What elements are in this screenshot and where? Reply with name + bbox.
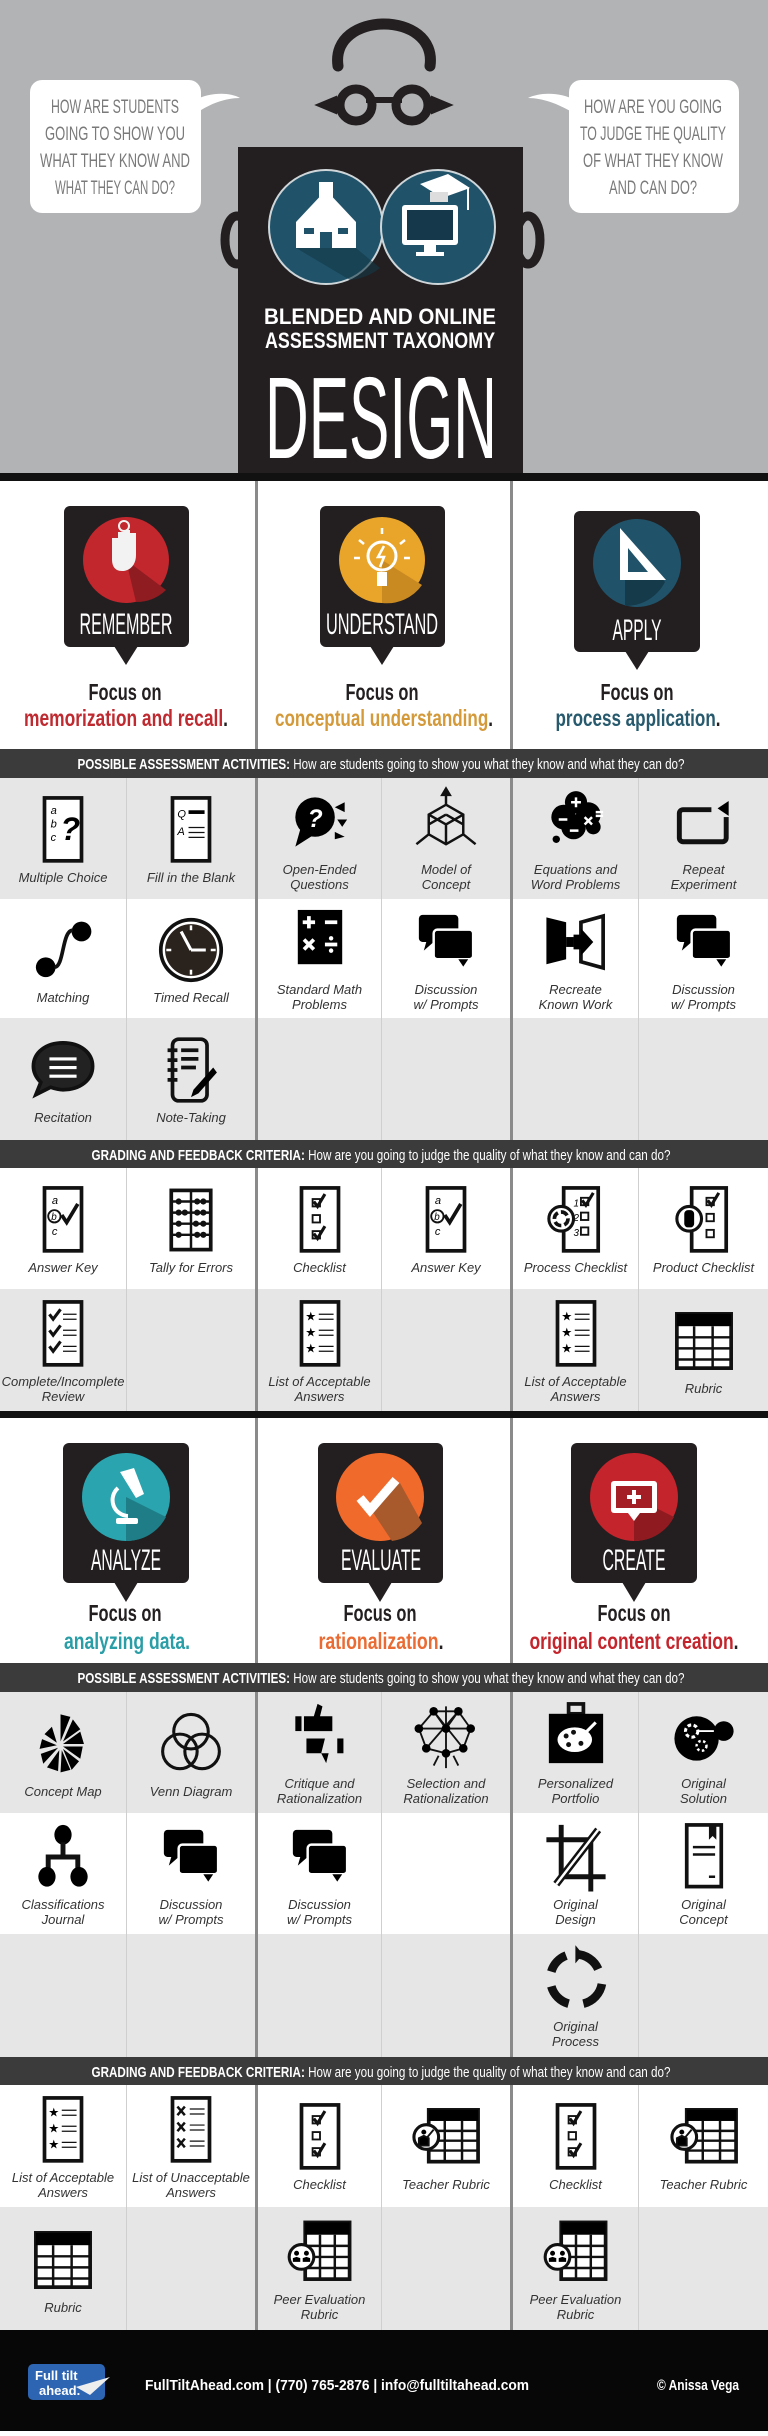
speech bubble: right — [528, 80, 739, 213]
cell: Teacher Rubric — [382, 2085, 513, 2207]
grid row: activities 2 — [0, 899, 768, 1018]
cell: Checklist — [258, 1168, 382, 1289]
cell: Checklist: Checklist — [293, 1260, 346, 1274]
cell: Teacher Rubric 2: Teacher Rubric — [660, 2177, 747, 2192]
icon: glasses head — [225, 24, 540, 264]
cell: Peer Evaluation Rubric 2: Rubric — [557, 2307, 594, 2322]
cell: Complete/Incomplete: Complete/Incomplete — [2, 1374, 124, 1388]
cell: Answer Key: Answer Key — [28, 1260, 98, 1274]
cell: Original Concept: Original — [681, 1897, 726, 1912]
cell: Process Checklist — [513, 1168, 639, 1289]
cell: Rubric — [675, 1312, 733, 1396]
cell: Discussion: Discussion — [160, 1897, 222, 1912]
level: understand — [320, 506, 445, 665]
cell: Teacher Rubric: Teacher Rubric — [402, 2177, 490, 2192]
title text: DESIGN — [265, 353, 497, 481]
cell: List of Acceptable: Answers — [38, 2184, 88, 2200]
panel: section 1 levels — [24, 481, 720, 749]
grid row: grading 2 — [0, 1289, 768, 1411]
cell: Recreate Known Work: Known Work — [539, 997, 612, 1012]
level: apply — [574, 511, 700, 670]
cell: Model of Concept — [382, 778, 513, 899]
grid row: activities 2-3 — [0, 1934, 768, 2057]
cell: Fill in the Blank — [127, 778, 258, 899]
cell: Open-Ended Questions — [258, 778, 382, 899]
cell: Original Process: Process — [552, 2034, 599, 2049]
cell: Original Process — [513, 1934, 639, 2057]
cell: Original Solution — [674, 1716, 734, 1806]
cell: List of Acceptable 2: Answers — [551, 1388, 600, 1404]
cell: Teacher Rubric 2 — [660, 2108, 748, 2192]
cell: Model of Concept: Concept — [422, 877, 470, 892]
focus texts 2: Focus on — [598, 1600, 670, 1626]
cell: Recreate Known Work: Recreate — [549, 982, 602, 997]
level: remember: REMEMBER — [80, 608, 172, 641]
cell: Critique: Rationalization — [277, 1791, 362, 1806]
cell: Matching — [0, 899, 127, 1018]
cell: Recreate Known Work — [513, 899, 639, 1018]
cell: Process Checklist: Process Checklist — [524, 1260, 627, 1274]
cell: Original Concept — [679, 1823, 728, 1927]
speech bubble: left: WHAT THEY CAN DO? — [55, 178, 175, 199]
cell: Discussion: Discussion — [415, 982, 477, 997]
title box — [238, 147, 523, 483]
cell: Repeat Experiment: Repeat — [683, 862, 724, 877]
speech bubble: left — [30, 80, 240, 213]
title text: ASSESSMENT TAXONOMY — [265, 328, 495, 353]
panel: section 2 levels — [63, 1418, 738, 1663]
logo — [28, 2364, 110, 2400]
speech bubble: left: WHAT THEY KNOW AND — [40, 151, 190, 172]
cell: List of Acceptable — [258, 1289, 382, 1411]
cell: Rubric: Rubric — [44, 2300, 82, 2314]
cell: Venn Diagram — [127, 1692, 258, 1813]
cell: Answer Key 2 — [382, 1168, 513, 1289]
cell: Fill in the Blank: Fill in the Blank — [147, 870, 235, 884]
bar: grading criteria 1 — [0, 1140, 768, 1168]
level: remember — [64, 506, 189, 665]
speech bubble: right: AND CAN DO? — [609, 178, 697, 199]
cell: Rubric — [0, 2207, 127, 2330]
cell: Tally for Errors — [127, 1168, 258, 1289]
cell: Checklist 2: Checklist — [549, 2177, 602, 2192]
level: analyze: ANALYZE — [91, 1544, 161, 1577]
cell: Discussion — [382, 899, 513, 1018]
cell: Critique: Critique and — [284, 1776, 355, 1791]
cell: Note-Taking: Note-Taking — [156, 1110, 226, 1125]
focus texts 2: Focus on — [344, 1600, 416, 1626]
cell: Original Solution: Solution — [680, 1791, 727, 1806]
title text — [264, 304, 497, 483]
contact text: FullTiltAhead.com | (770) 765-2876 | info@fulltiltahead.com — [145, 2377, 529, 2394]
cell: Discussion: w/ Prompts — [158, 1912, 224, 1927]
cell: List of Acceptable 2 — [513, 1289, 639, 1411]
cell: Timed Recall: Timed Recall — [153, 990, 229, 1004]
cell: Multiple Choice — [0, 778, 127, 899]
cell: Personalized Portfolio: Personalized — [538, 1776, 613, 1791]
cell: List of Unacceptable: List of Unacceptable — [132, 2170, 250, 2184]
cell: Discussion 2: w/ Prompts — [671, 997, 736, 1012]
cell: Original Concept: Concept — [679, 1912, 728, 1927]
level: create: CREATE — [602, 1544, 666, 1577]
cell: Complete/Incomplete — [0, 1289, 127, 1411]
level: evaluate: EVALUATE — [341, 1544, 421, 1577]
cell: Repeat Experiment: Experiment — [671, 877, 736, 892]
cell: Discussion 2: Discussion — [288, 1897, 351, 1912]
cell: List of Acceptable: Answers — [295, 1388, 344, 1404]
cell: Model of Concept: Model of — [421, 862, 471, 877]
cell: Peer Evaluation Rubric 2: Peer Evaluation — [530, 2292, 621, 2307]
focus texts: Focus on — [88, 679, 162, 705]
cell: Equations — [513, 778, 639, 899]
grid row: activities 2-2 — [0, 1813, 768, 1934]
cell: Peer Evaluation Rubric 2 — [513, 2207, 639, 2330]
cell: Concept Map: Concept Map — [24, 1784, 102, 1798]
cell: Open-Ended Questions: Open-Ended — [283, 862, 356, 877]
cell: Concept Map — [0, 1692, 127, 1813]
bar: grading criteria 1: GRADING AND FEEDBACK CRITERIA: How are you going to judge the quality of what they know and can do? — [92, 1147, 670, 1164]
cell: Tally for Errors: Tally for Errors — [149, 1260, 233, 1274]
cell: Recitation: Recitation — [34, 1110, 92, 1125]
title text: BLENDED AND ONLINE — [264, 304, 496, 329]
cell: Checklist: Checklist — [293, 2177, 346, 2192]
header — [0, 0, 768, 481]
cell: Checklist 2 — [513, 2085, 639, 2207]
focus texts: Focus on — [600, 679, 674, 705]
bar: possible assessment activities 1 — [0, 749, 768, 778]
grid row: grading 2-2 — [0, 2207, 768, 2330]
cell: List of Acceptable: List of Acceptable — [268, 1374, 371, 1388]
cell: Note-Taking — [127, 1018, 258, 1140]
cell: Selection: Rationalization — [403, 1791, 489, 1806]
bar: possible assessment activities 2 — [0, 1663, 768, 1692]
bar: grading criteria 2 — [0, 2057, 768, 2085]
focus texts 2: analyzing data. — [64, 1628, 190, 1654]
cell: Critique — [258, 1692, 382, 1813]
focus texts 2: Focus on — [88, 1600, 162, 1626]
cell: List of Acceptable — [0, 2085, 127, 2207]
cell: Repeat Experiment — [671, 801, 737, 892]
credit: © Anissa Vega — [657, 2377, 740, 2394]
level: apply: APPLY — [612, 614, 662, 647]
level: evaluate — [318, 1443, 443, 1602]
grid row: grading 1 — [0, 1168, 768, 1289]
focus texts: memorization and recall. — [24, 705, 228, 731]
cell: Standard Math: Standard Math — [277, 982, 362, 997]
cell: Standard Math — [258, 899, 382, 1018]
logo: ahead. — [39, 2383, 80, 2398]
cell: Original Design — [513, 1813, 639, 1934]
cell: Discussion 2 — [671, 914, 736, 1012]
icon: schoolhouse circle — [269, 170, 383, 284]
cell: List of Acceptable 2: List of Acceptable — [524, 1374, 627, 1388]
cell: Personalized Portfolio — [513, 1692, 639, 1813]
cell: Peer Evaluation Rubric: Rubric — [301, 2307, 338, 2322]
cell: Peer Evaluation Rubric — [258, 2207, 382, 2330]
cell: Answer Key — [0, 1168, 127, 1289]
cell: Original Solution: Original — [681, 1776, 726, 1791]
focus texts: process application. — [556, 705, 720, 731]
level: understand: UNDERSTAND — [326, 608, 438, 641]
cell: Discussion 2: Discussion — [672, 982, 735, 997]
cell: Standard Math: Problems — [292, 997, 347, 1012]
bar: grading criteria 2: GRADING AND FEEDBACK CRITERIA: How are you going to judge the quality of what they know and can do? — [92, 2064, 670, 2081]
cell: Peer Evaluation Rubric: Peer Evaluation — [274, 2292, 365, 2307]
cell: Selection — [382, 1692, 513, 1813]
focus texts: conceptual understanding. — [275, 705, 493, 731]
cell: Classifications Journal — [0, 1813, 127, 1934]
cell: Equations: Equations and — [534, 862, 617, 877]
focus texts — [24, 679, 720, 731]
speech bubble: left: HOW ARE STUDENTS — [51, 97, 179, 118]
cell: Venn Diagram: Venn Diagram — [150, 1784, 232, 1798]
cell: Original Design: Design — [555, 1912, 596, 1927]
cell: Timed Recall — [127, 899, 258, 1018]
cell: Discussion 2 — [258, 1813, 382, 1934]
cell: Answer Key 2: Answer Key — [411, 1260, 481, 1274]
speech bubble: left: GOING TO SHOW YOU — [45, 124, 185, 145]
cell: Matching: Matching — [37, 990, 89, 1004]
cell: Original Process: Original — [553, 2019, 598, 2034]
level: analyze — [63, 1443, 189, 1602]
cell: Multiple Choice: Multiple Choice — [19, 870, 107, 884]
cell: Selection: Selection and — [407, 1776, 485, 1791]
grid row: activities 1 — [0, 778, 768, 899]
grid row: grading 2-1 — [0, 2085, 768, 2207]
cell: Personalized Portfolio: Portfolio — [552, 1791, 599, 1806]
cell: Discussion 2: w/ Prompts — [287, 1912, 352, 1927]
cell: Original Design: Original — [553, 1897, 598, 1912]
footer — [0, 2330, 768, 2431]
grid row: activities 3 — [0, 1018, 768, 1140]
cell: Classifications Journal: Journal — [42, 1912, 84, 1927]
focus texts: Focus on — [346, 679, 418, 705]
focus texts 2 — [64, 1600, 738, 1654]
cell: Discussion — [127, 1813, 258, 1934]
cell: Product Checklist — [653, 1186, 754, 1274]
cell: Complete/Incomplete: Review — [42, 1388, 84, 1404]
grid row: activities 2-1 — [0, 1692, 768, 1813]
focus texts 2: rationalization. — [318, 1628, 444, 1654]
cell: Classifications Journal: Classifications — [21, 1897, 105, 1912]
cell: Checklist — [258, 2085, 382, 2207]
cell: List of Unacceptable — [127, 2085, 258, 2207]
cell: List of Acceptable: List of Acceptable — [12, 2170, 114, 2184]
cell: Recitation — [0, 1018, 127, 1140]
logo: Full tilt — [35, 2368, 78, 2383]
cell: Discussion: w/ Prompts — [413, 997, 478, 1012]
level: create — [571, 1443, 697, 1602]
cell: Open-Ended Questions: Questions — [290, 877, 349, 892]
cell: List of Unacceptable: Answers — [166, 2184, 216, 2200]
cell: Product Checklist: Product Checklist — [653, 1260, 754, 1274]
cell: Rubric: Rubric — [685, 1381, 722, 1396]
cell: Equations: Word Problems — [531, 877, 620, 892]
icon: computer circle — [381, 170, 495, 284]
